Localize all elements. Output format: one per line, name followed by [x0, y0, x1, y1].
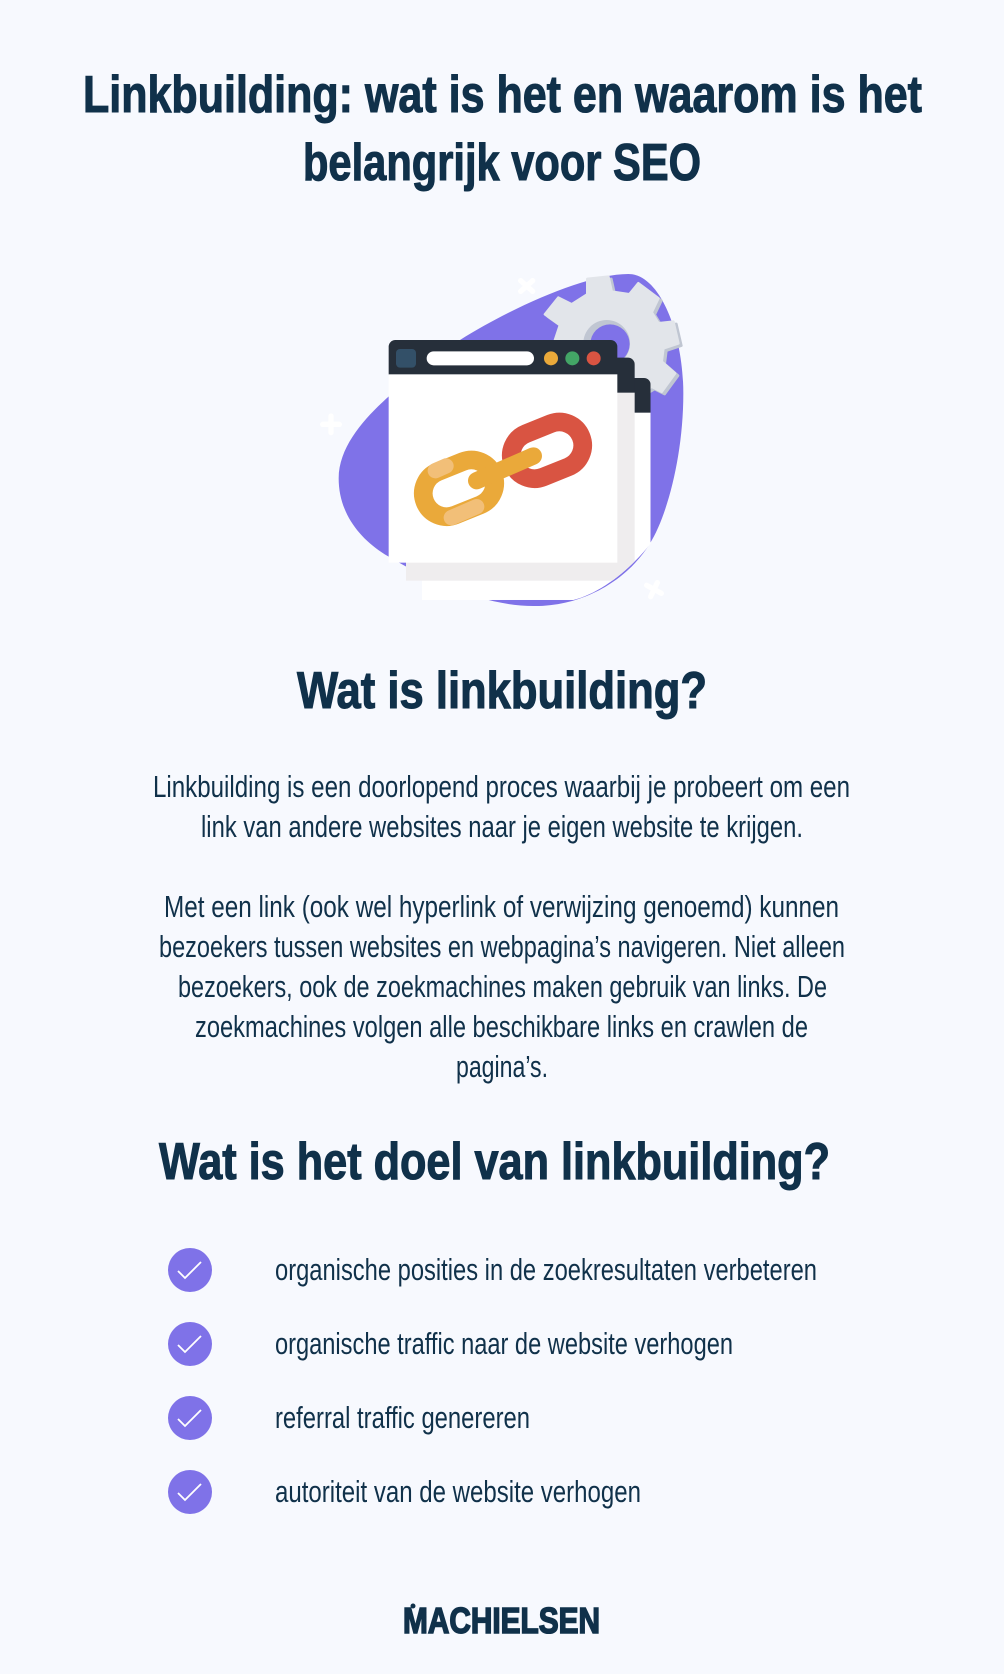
- gear: [545, 277, 681, 419]
- front browser window: [389, 340, 617, 563]
- text block: definition: link van andere websites naar je eigen website te krijgen.: [201, 809, 803, 844]
- item 4: [168, 1470, 641, 1514]
- item 2: organische traffic naar de website verhogen: [275, 1326, 733, 1361]
- logo: Machielsen: MACHIELSEN: [403, 1600, 600, 1641]
- title: belangrijk voor SEO: [303, 134, 701, 192]
- back browser window: [422, 378, 651, 600]
- checklist: [168, 1248, 817, 1514]
- item 1: organische posities in de zoekresultaten verbeteren: [275, 1252, 817, 1287]
- text block: links explained: [159, 889, 845, 1084]
- middle browser window: [406, 358, 635, 581]
- text block: links explained: pagina’s.: [456, 1049, 548, 1084]
- item 3: referral traffic genereren: [275, 1400, 530, 1435]
- item 2: [168, 1322, 733, 1366]
- illustration: chain link in browser windows: [323, 274, 683, 606]
- item 1: [168, 1248, 817, 1292]
- text block: definition: [153, 769, 850, 844]
- heading: wat is linkbuilding: Wat is linkbuilding?: [297, 662, 707, 720]
- heading: doel van linkbuilding: Wat is het doel van linkbuilding?: [159, 1133, 830, 1191]
- item 3: [168, 1396, 530, 1440]
- text block: links explained: Met een link (ook wel hyperlink of verwijzing genoemd) kunnen: [164, 889, 839, 924]
- item 4: autoriteit van de website verhogen: [275, 1474, 641, 1509]
- sparkles: [323, 281, 661, 597]
- title: [83, 66, 922, 192]
- icon: chain: [416, 415, 590, 524]
- text block: links explained: zoekmachines volgen alle beschikbare links en crawlen de: [195, 1009, 808, 1044]
- purple blob: [339, 274, 683, 606]
